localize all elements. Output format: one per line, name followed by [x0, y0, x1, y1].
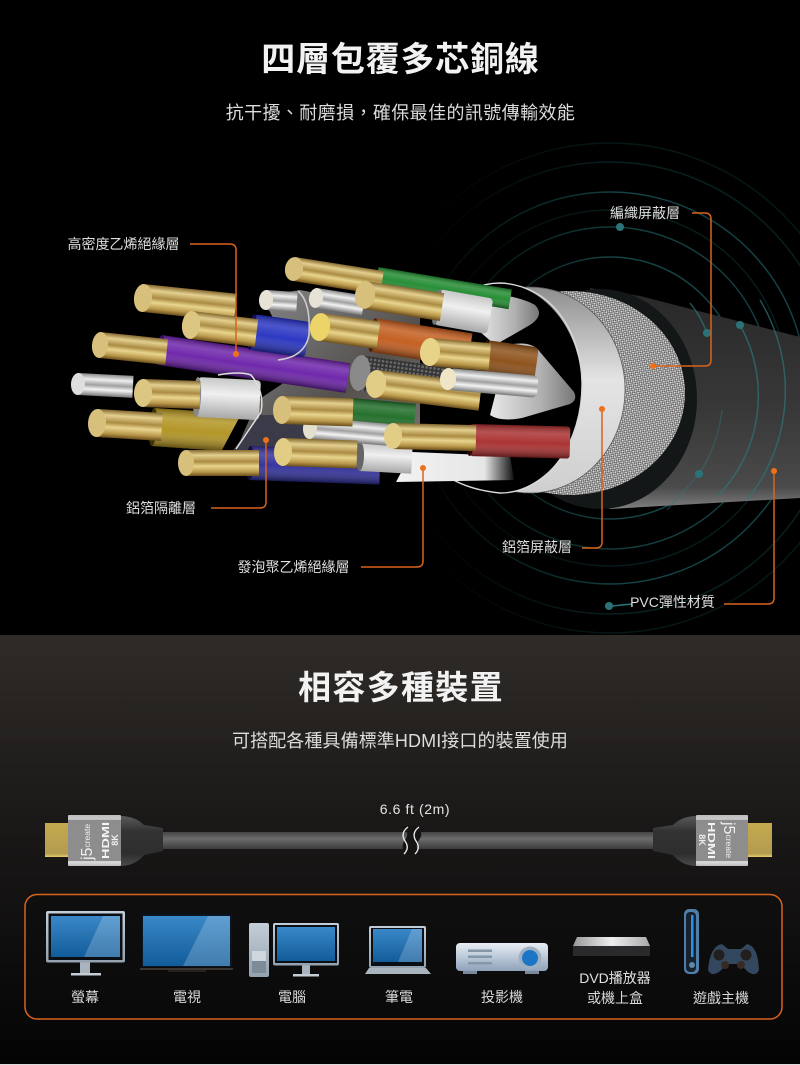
device: laptop — [365, 926, 431, 1005]
label: foil isolation: 鋁箔隔離層 — [126, 500, 196, 516]
label: 電視 — [173, 989, 201, 1005]
label: PVC: PVC彈性材質 — [630, 594, 715, 610]
label: 螢幕 — [71, 989, 99, 1005]
device: game console — [684, 909, 759, 1006]
foil wrap: upper right — [478, 292, 539, 345]
left connector: j5 — [79, 848, 96, 860]
title: 四層包覆多芯銅線 — [261, 41, 540, 79]
left connector: create — [82, 824, 92, 848]
right connector: 8K — [697, 834, 707, 846]
label: DVD播放器 — [579, 970, 651, 986]
foil sheet: bottom — [396, 452, 514, 482]
cable opening — [412, 283, 582, 493]
label: high-density polyethylene insulation: 高密度乙烯絕緣層 — [68, 236, 180, 252]
wire: white top right — [430, 289, 493, 334]
label: braided shield — [610, 205, 711, 369]
device box — [25, 894, 782, 1019]
gold conductor 1 — [283, 256, 384, 295]
label: 遊戲主機 — [693, 990, 749, 1006]
device: computer — [249, 923, 339, 1005]
gold conductor 12 — [353, 280, 444, 321]
left connector: 8K — [110, 834, 120, 846]
heading: 相容多種裝置 — [298, 669, 504, 706]
right connector — [653, 815, 772, 866]
foil behind wires — [235, 290, 420, 452]
label: foam polyethylene insulation: 發泡聚乙烯絕緣層 — [238, 559, 350, 575]
gold conductor 5 — [134, 379, 200, 409]
label: 投影機 — [481, 989, 523, 1005]
gold conductor 4 — [91, 331, 168, 365]
jacket collar — [503, 289, 697, 509]
subtitle: 抗干擾、耐磨損，確保最佳的訊號傳輸效能 — [226, 103, 575, 123]
wire: blue — [246, 314, 310, 358]
label: braided shield: 編織屏蔽層 — [610, 205, 680, 221]
rings over jacket — [667, 300, 785, 510]
ring dots — [605, 223, 744, 610]
subheading: 可搭配各種具備標準HDMI接口的裝置使用 — [232, 731, 568, 751]
gold conductor 7 — [178, 450, 259, 476]
label: foil isolation — [126, 437, 269, 516]
right connector: HDMI — [705, 822, 717, 859]
opening rim — [450, 283, 582, 493]
device: projector — [456, 943, 548, 1005]
HDMI cable — [45, 815, 772, 866]
label: 電腦 — [278, 989, 306, 1005]
label: foil shield — [502, 406, 605, 555]
gold conductor 2 — [133, 283, 237, 322]
gold conductor 9 — [274, 438, 357, 469]
wire: purple — [154, 335, 350, 393]
panel: compatible devices — [0, 635, 800, 1065]
label: PVC — [612, 468, 777, 610]
break mark — [401, 826, 422, 855]
gold conductor 6 — [87, 408, 163, 441]
wire: red — [466, 424, 570, 459]
right connector: create — [724, 834, 734, 858]
wire: yellow — [148, 408, 241, 452]
gold conductor 8 — [273, 396, 353, 426]
silver conductor 2 — [308, 287, 365, 315]
wire bundle — [70, 256, 575, 485]
wire: orange — [366, 318, 472, 367]
braided shield layer — [455, 291, 685, 495]
label: 筆電 — [385, 989, 413, 1005]
signal rings — [365, 143, 800, 633]
aluminum foil shield layer — [435, 287, 625, 493]
label: high-density polyethylene insulation — [68, 236, 239, 357]
wire: green — [375, 267, 512, 309]
silver conductor 3 — [70, 373, 134, 398]
silver conductor 5 — [439, 367, 539, 398]
wrap outline: around blue — [278, 291, 309, 360]
label: foam polyethylene insulation — [238, 465, 426, 575]
length label: 6.6 ft (2m) — [380, 801, 450, 817]
right connector: j5 — [720, 822, 737, 834]
gold conductor 13 — [364, 369, 482, 411]
silver conductor 4 — [302, 416, 389, 446]
wire: dark green — [349, 398, 416, 432]
gold conductor 10 — [384, 423, 476, 451]
left connector: HDMI — [100, 822, 112, 859]
foil wrap: lower right — [490, 344, 575, 419]
device: DVD player — [573, 937, 651, 1006]
wire: braided core — [348, 354, 452, 403]
wire: bottom white — [355, 443, 413, 474]
cord — [160, 832, 656, 849]
label: foil shield: 鋁箔屏蔽層 — [502, 539, 572, 555]
dark foil patch — [232, 415, 330, 452]
device: DVD player: 或機上盒 — [587, 990, 643, 1006]
gold conductor 3 — [180, 310, 258, 347]
left connector — [45, 815, 163, 866]
gold conductor 14 — [419, 337, 491, 371]
device: monitor — [46, 911, 125, 1005]
wire: white left — [192, 377, 261, 420]
wire: bottom blue — [245, 446, 381, 485]
wire: brown — [479, 340, 539, 381]
silver conductor 1 — [258, 290, 298, 312]
wrap outline: around white — [218, 373, 262, 449]
device: TV — [140, 914, 233, 1005]
gold conductor 11 — [308, 312, 380, 349]
panel: cable layers — [0, 0, 800, 635]
cable jacket — [585, 288, 800, 509]
